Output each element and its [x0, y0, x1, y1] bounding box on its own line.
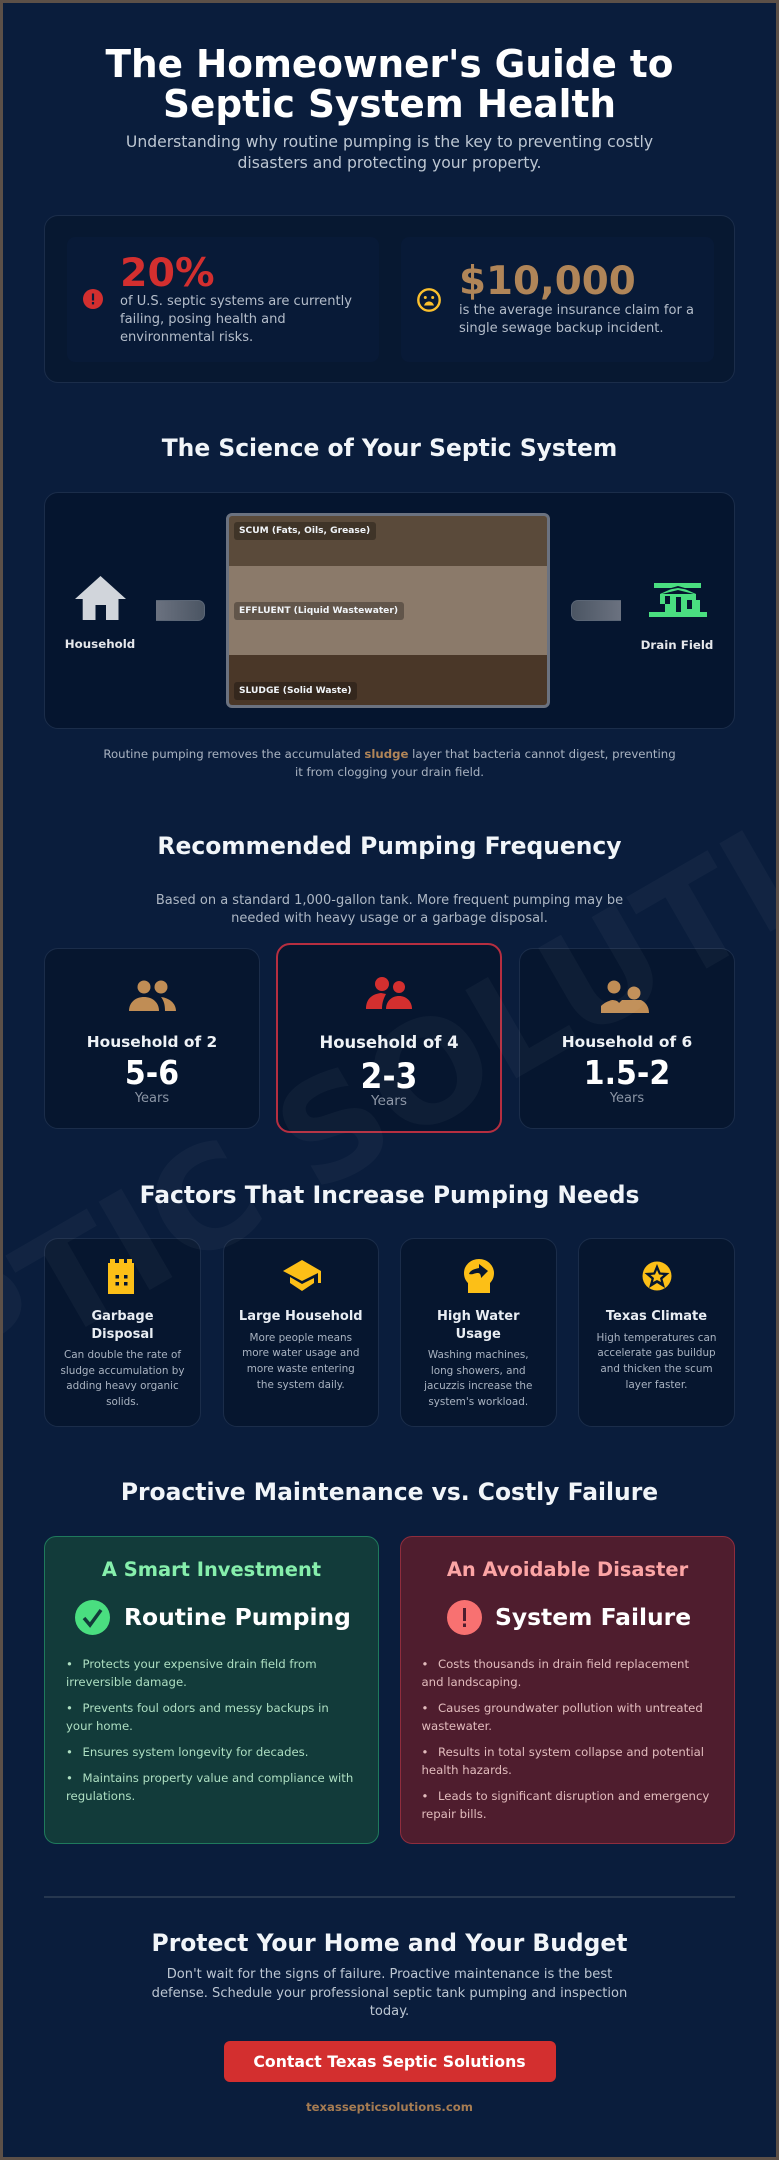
stat text: insurance claim: is the average insurance claim for a: [459, 302, 694, 318]
stat card: 20 percent: [67, 237, 379, 362]
benefit list: Ensures system longevity for decades.: [82, 1744, 308, 1758]
caption: sludge: Routine pumping removes the accumulated sludge layer that bacteria cannot digest, preventing: [103, 747, 676, 761]
factor description: Can double the rate of: [64, 1349, 181, 1361]
factor description: long showers, and: [431, 1365, 526, 1377]
label: scum: SCUM (Fats, Oils, Grease): [239, 526, 370, 536]
factor description: more waste entering: [247, 1363, 355, 1375]
card: large household: [222, 1238, 379, 1427]
benefit list: Protects your expensive drain field from: [82, 1656, 317, 1670]
stat value: 20%: 20%: [120, 250, 215, 296]
panel: key statistics: [44, 215, 735, 383]
factor title: Usage: [456, 1327, 501, 1342]
benefit list: Prevents foul odors and messy backups in: [82, 1700, 329, 1714]
benefit list: [66, 1656, 353, 1802]
icon: star badge: [642, 1262, 672, 1290]
layer: sludge: [229, 655, 547, 705]
call to action text: [152, 1967, 627, 2019]
routine pumping title: Routine Pumping: [124, 1603, 351, 1631]
caption: sludge: [103, 747, 676, 779]
card: texas climate: [578, 1238, 735, 1427]
consequence list: [422, 1656, 709, 1820]
household label: Household of 6: [562, 1033, 692, 1051]
factor description: High temperatures can: [597, 1332, 716, 1344]
consequence list: Causes groundwater pollution with untreated: [438, 1700, 703, 1714]
subtitle: disasters and protecting your property.: [237, 154, 542, 172]
card: high water usage: [400, 1238, 556, 1427]
call to action text: Don't wait for the signs of failure. Proactive maintenance is the best: [167, 1967, 612, 1982]
years unit: Years: [610, 1091, 644, 1106]
subtext: frequency: [156, 893, 623, 926]
consequence list: and landscaping.: [422, 1674, 521, 1688]
system failure title: System Failure: [495, 1603, 691, 1631]
panel: routine pumping: [44, 1536, 379, 1844]
factor description: sludge accumulation by: [60, 1365, 185, 1377]
consequence list: repair bills.: [422, 1806, 487, 1820]
years unit: Years: [371, 1093, 407, 1109]
icon: drain field: [649, 583, 707, 617]
pipe: inlet: [156, 600, 205, 621]
call to action text: today.: [370, 2004, 409, 2019]
caption: sludge: it from clogging your drain field.: [295, 765, 484, 779]
household label: Household of 2: [87, 1033, 217, 1051]
stat text: failing systems: failing, posing health and: [120, 312, 286, 327]
benefit list: •: [66, 1770, 73, 1784]
consequence list: wastewater.: [422, 1718, 492, 1732]
button: contact: Contact Texas Septic Solutions: [253, 2052, 526, 2071]
heading: frequency: Recommended Pumping Frequency: [157, 832, 622, 860]
factor title: [437, 1309, 520, 1342]
years unit: Years: [135, 1091, 169, 1106]
subtitle: Understanding why routine pumping is the key to preventing costly: [126, 133, 653, 151]
consequence list: •: [422, 1788, 428, 1802]
factor description: the system daily.: [257, 1379, 345, 1391]
card: household of 4 (highlighted): [276, 943, 502, 1133]
factor title: Garbage: [91, 1309, 154, 1324]
stat text: insurance claim: [459, 302, 694, 336]
subtext: frequency: needed with heavy usage or a garbage disposal.: [231, 911, 548, 926]
pipe: outlet: [571, 600, 620, 621]
stat text: insurance claim: single sewage backup incident.: [459, 321, 664, 336]
heading: call to action: Protect Your Home and Your Budget: [152, 1929, 627, 1957]
factor description: [60, 1349, 185, 1408]
panel: system failure: [400, 1536, 735, 1844]
benefit list: irreversible damage.: [66, 1674, 187, 1688]
consequence list: •: [422, 1656, 428, 1670]
label: effluent: EFFLUENT (Liquid Wastewater): [239, 606, 398, 616]
factor description: more water usage and: [242, 1347, 359, 1359]
factor title: Large Household: [239, 1309, 363, 1324]
label: scum: [234, 522, 376, 540]
stat text: failing systems: of U.S. septic systems are currently: [120, 294, 352, 308]
icon: disposal: [108, 1259, 134, 1294]
factor title: Texas Climate: [606, 1309, 707, 1324]
factor description: Washing machines,: [428, 1349, 529, 1361]
title: Septic System Health: [163, 82, 616, 126]
panel heading: A Smart Investment: [102, 1558, 321, 1581]
factor title: High Water: [437, 1309, 520, 1324]
factor description: and thicken the scum: [600, 1363, 713, 1375]
factor title: [91, 1309, 154, 1342]
layer: scum: [229, 516, 547, 566]
panel: septic diagram: [44, 492, 735, 729]
consequence list: Leads to significant disruption and emergency: [438, 1788, 709, 1802]
factor description: More people means: [250, 1332, 352, 1344]
consequence list: health hazards.: [422, 1762, 512, 1776]
icon: alert circle: [83, 289, 103, 309]
title: The Homeowner's Guide to: [105, 42, 674, 87]
factor description: solids.: [106, 1396, 139, 1408]
benefit list: Maintains property value and compliance with: [82, 1770, 353, 1784]
stat card: 10000 dollars: [400, 237, 714, 362]
subtitle: [126, 133, 653, 172]
years value: 1.5-2: [584, 1054, 670, 1093]
icon: water: [464, 1259, 494, 1293]
icon: people: [601, 980, 649, 1013]
call to action text: defense. Schedule your professional septic tank pumping and inspection: [152, 1986, 627, 2000]
icon: house: [75, 576, 126, 620]
stat value: $10,000: $10,000: [459, 259, 636, 304]
icon: alert circle: [447, 1600, 482, 1635]
benefit list: your home.: [66, 1718, 133, 1732]
layer: effluent: [229, 566, 547, 655]
factor description: [242, 1332, 359, 1391]
septic tank: [226, 513, 550, 708]
label: drain field: Drain Field: [641, 638, 713, 652]
card: household of 2: [44, 948, 260, 1129]
heading: comparison: Proactive Maintenance vs. Costly Failure: [121, 1478, 658, 1506]
benefit list: regulations.: [66, 1788, 135, 1802]
consequence list: Costs thousands in drain field replacement: [438, 1656, 689, 1670]
label: household: Household: [65, 637, 135, 651]
title: [105, 42, 674, 126]
years value: 5-6: [125, 1054, 179, 1093]
factor description: [424, 1349, 532, 1408]
subtext: frequency: Based on a standard 1,000-gallon tank. More frequent pumping may be: [156, 893, 623, 908]
stat text: failing systems: [120, 294, 352, 345]
factor description: jacuzzis increase the: [424, 1380, 532, 1392]
card: garbage disposal: [44, 1238, 201, 1427]
website link: texassepticsolutions.com: [306, 2100, 473, 2114]
card: household of 6: [519, 948, 735, 1129]
icon: people: [366, 977, 412, 1009]
benefit list: •: [66, 1744, 73, 1758]
label: sludge: SLUDGE (Solid Waste): [239, 686, 352, 696]
household label: Household of 4: [319, 1033, 458, 1052]
icon: sad face: [417, 288, 441, 312]
factor description: layer faster.: [626, 1379, 687, 1391]
label: sludge: [234, 682, 357, 700]
stat text: failing systems: environmental risks.: [120, 330, 253, 345]
consequence list: •: [422, 1700, 428, 1714]
factor description: [597, 1332, 716, 1391]
button: contact: [224, 2041, 556, 2082]
factor description: accelerate gas buildup: [597, 1347, 716, 1359]
icon: check circle: [75, 1600, 110, 1635]
icon: people: [129, 980, 176, 1011]
label: effluent: [234, 602, 404, 620]
factor description: adding heavy organic: [66, 1380, 179, 1392]
consequence list: •: [422, 1744, 428, 1758]
factor title: Disposal: [91, 1327, 154, 1342]
years value: 2-3: [361, 1057, 417, 1097]
heading: factors: Factors That Increase Pumping Needs: [140, 1181, 639, 1209]
panel heading: An Avoidable Disaster: [447, 1558, 688, 1581]
benefit list: •: [66, 1700, 73, 1714]
heading: science: The Science of Your Septic System: [162, 434, 617, 462]
benefit list: •: [66, 1656, 73, 1670]
icon: graduation cap: [283, 1260, 321, 1291]
consequence list: Results in total system collapse and potential: [438, 1744, 704, 1758]
factor description: system's workload.: [428, 1396, 528, 1408]
